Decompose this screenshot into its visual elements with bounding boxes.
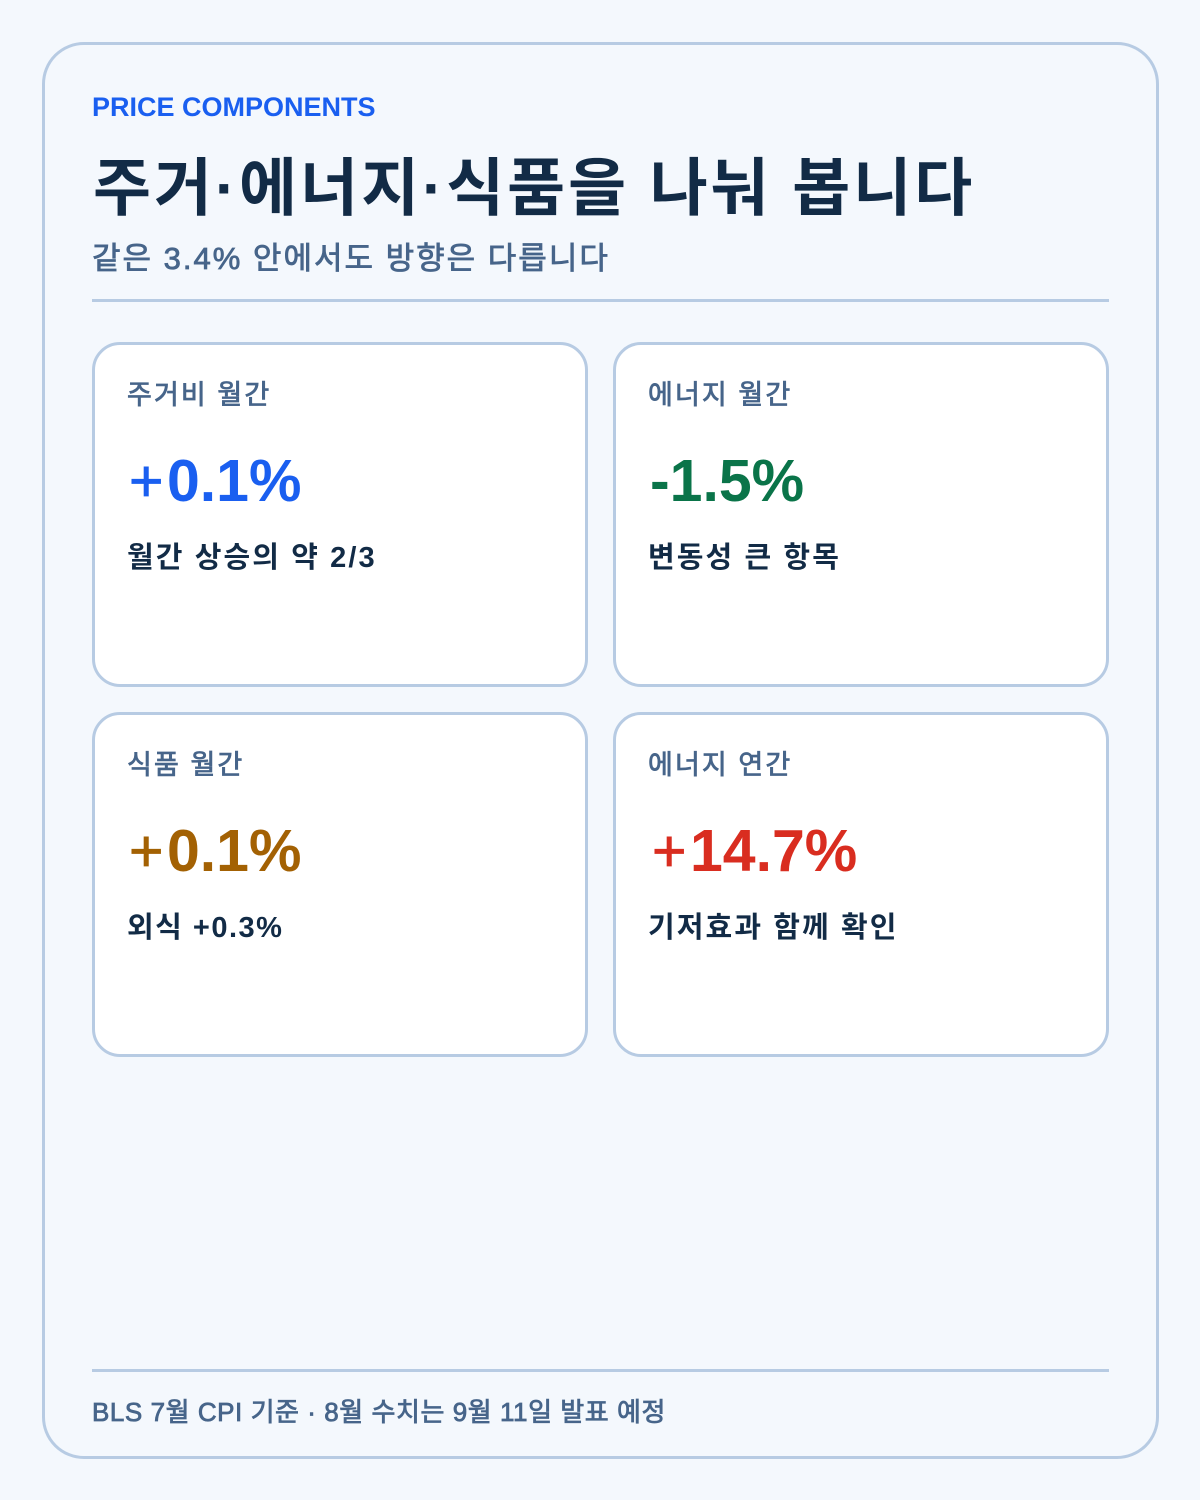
- panel: housing monthly: [92, 342, 588, 687]
- note: 변동성 큰 항목: [648, 542, 841, 574]
- label: 주거비 월간: [127, 380, 271, 410]
- title: 주거·에너지·식품을 나눠 봅니다: [93, 154, 975, 224]
- label: 에너지 연간: [648, 750, 792, 780]
- value: +0.1%: [129, 818, 301, 884]
- value: +0.1%: [129, 448, 301, 514]
- note: 월간 상승의 약 2/3: [127, 542, 377, 574]
- note: 기저효과 함께 확인: [648, 912, 899, 944]
- value: +14.7%: [652, 818, 857, 884]
- note: 외식 +0.3%: [127, 912, 283, 944]
- panel: energy monthly: [613, 342, 1109, 687]
- panel: food monthly: [92, 712, 588, 1057]
- label: 식품 월간: [127, 750, 244, 780]
- panel: energy yearly: [613, 712, 1109, 1057]
- subtitle: 같은 3.4% 안에서도 방향은 다릅니다: [92, 241, 610, 276]
- value: -1.5%: [650, 448, 804, 514]
- eyebrow: PRICE COMPONENTS: [92, 92, 376, 122]
- footer source: BLS 7월 CPI 기준 · 8월 수치는 9월 11일 발표 예정: [92, 1397, 666, 1427]
- label: 에너지 월간: [648, 380, 792, 410]
